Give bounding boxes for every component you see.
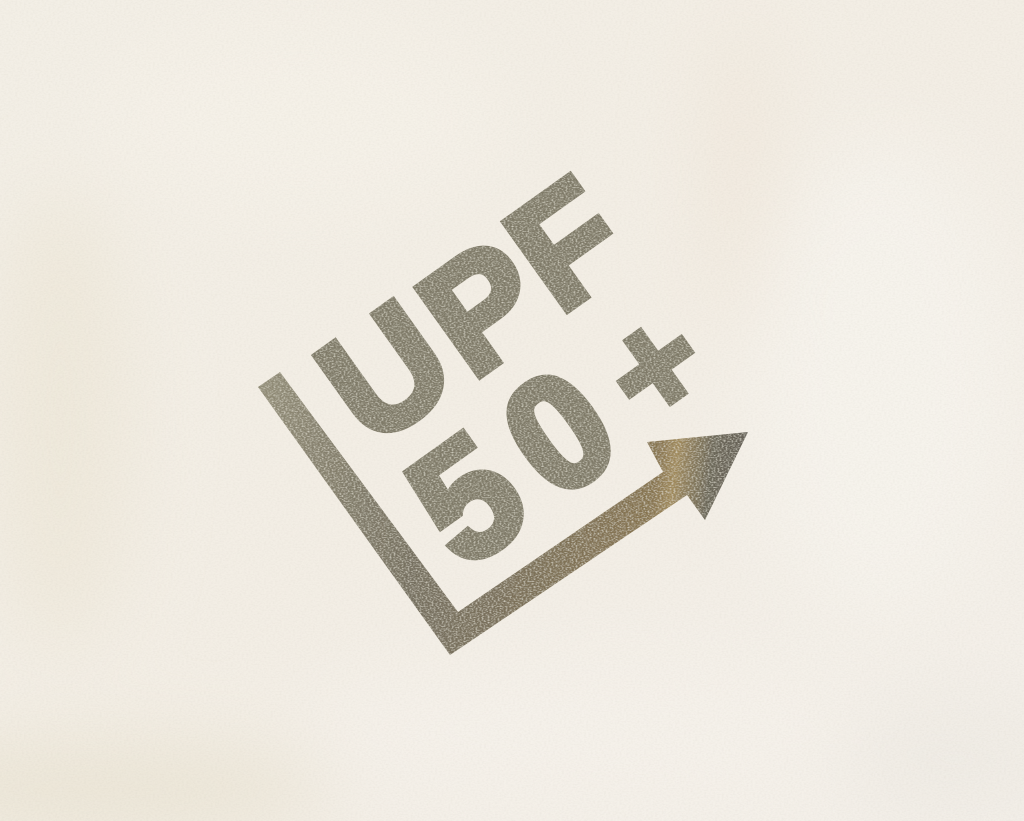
- heading: UPF: F: [478, 146, 657, 343]
- heading: UPF: [290, 146, 657, 476]
- heading: UPF: P: [390, 207, 576, 409]
- heading: 50+: +: [572, 274, 738, 458]
- heading: 50+: 5: [377, 398, 557, 600]
- heading: 50+: [377, 274, 738, 600]
- heading: 50+: 0: [471, 333, 647, 531]
- heading: UPF: U: [290, 269, 483, 476]
- icon: L-shaped axis rising to an arrow: [258, 372, 748, 655]
- logo: UPF 50+: [258, 146, 748, 655]
